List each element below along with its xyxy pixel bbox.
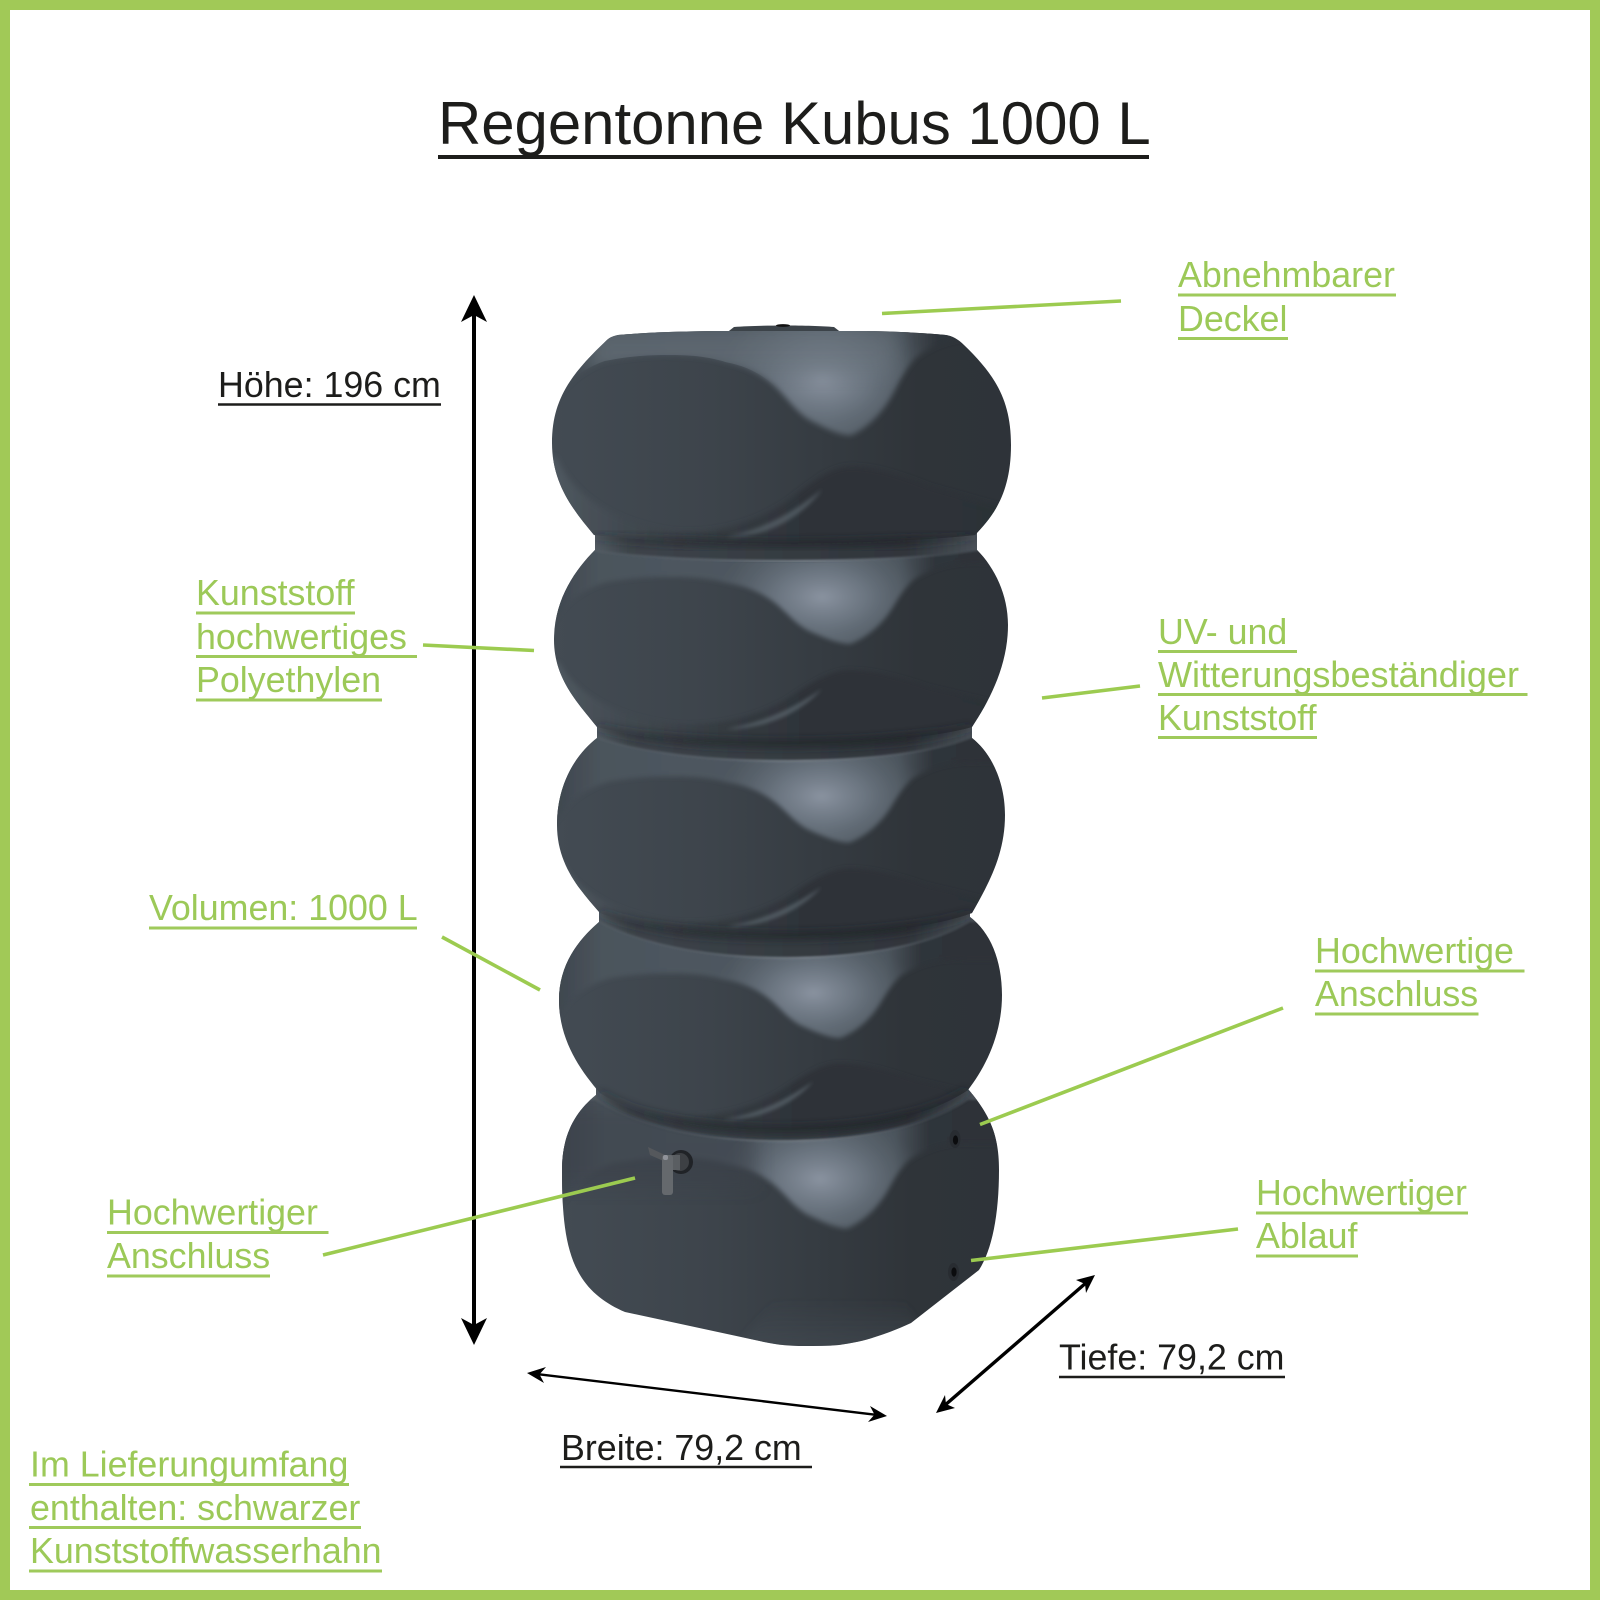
label: tap connection: Hochwertiger — [107, 1192, 318, 1232]
label: upper connection: Anschluss — [1315, 974, 1478, 1014]
connection hole upper — [950, 1130, 960, 1148]
label: volume: Volumen: 1000 L — [149, 888, 418, 928]
text block: scope of delivery: Im Lieferungumfang — [30, 1444, 348, 1484]
leader line: volume — [442, 937, 540, 990]
text block: scope of delivery: Kunststoffwasserhahn — [30, 1531, 382, 1571]
label: drain: Ablauf — [1256, 1216, 1358, 1256]
label: removable lid: Deckel — [1178, 299, 1287, 339]
label: drain: Hochwertiger — [1256, 1173, 1467, 1213]
text block: scope of delivery — [29, 1444, 382, 1571]
label: UV resistant: Kunststoff — [1158, 698, 1317, 738]
label: width: Breite: 79,2 cm — [561, 1428, 802, 1468]
rain barrel illustration — [531, 235, 1037, 1494]
tank segment 4 — [559, 912, 1002, 1126]
tank segment 5: base with tap — [562, 1088, 999, 1346]
label: upper connection — [1315, 931, 1524, 1014]
label: UV resistant: UV- und — [1158, 612, 1287, 652]
label: depth: Tiefe: 79,2 cm — [1059, 1338, 1284, 1378]
label: height: Höhe: 196 cm — [218, 365, 441, 405]
text block: scope of delivery: enthalten: schwarzer — [30, 1488, 360, 1528]
label: UV resistant — [1158, 612, 1528, 738]
label: tap connection — [107, 1192, 328, 1276]
icon: water tap — [648, 1147, 693, 1195]
arrow: depth — [936, 1275, 1095, 1413]
leader line: UV — [1042, 686, 1140, 698]
leader line: lid — [882, 301, 1121, 314]
label: plastic material: hochwertiges — [196, 617, 407, 657]
label: plastic material: Polyethylen — [196, 660, 381, 700]
leader line: plastic — [423, 645, 534, 650]
connection hole lower — [948, 1263, 959, 1281]
leader line: upper connection — [980, 1008, 1283, 1124]
label: removable lid: Abnehmbarer — [1178, 255, 1395, 295]
label: upper connection: Hochwertige — [1315, 931, 1514, 971]
label: UV resistant: Witterungsbeständiger — [1158, 654, 1519, 695]
title: Regentonne Kubus 1000 L — [438, 90, 1151, 157]
tank segment 1: top — [552, 331, 1011, 538]
label: plastic material: Kunststoff — [196, 573, 355, 613]
label: tap connection: Anschluss — [107, 1236, 270, 1276]
tank segment 2 — [554, 533, 1008, 735]
arrow: width — [527, 1367, 887, 1422]
label: removable lid — [1178, 255, 1396, 339]
tank segment 3 — [557, 727, 1005, 932]
label: drain — [1256, 1173, 1468, 1256]
label: plastic material — [196, 573, 417, 700]
leader line: tap — [323, 1178, 635, 1255]
arrow: height — [461, 295, 487, 1345]
leader line: drain — [971, 1229, 1238, 1260]
tank lid — [725, 324, 843, 334]
